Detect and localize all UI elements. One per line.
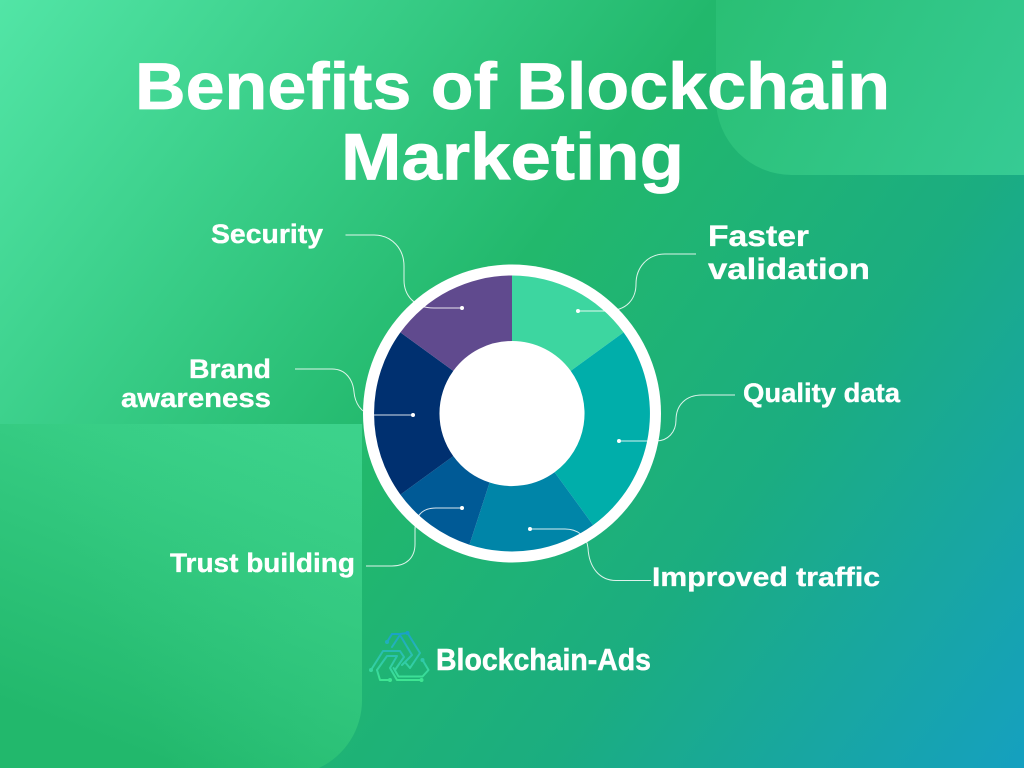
panel: top right (716, 0, 1024, 175)
slice: faster validation (512, 276, 624, 371)
slice: quality data (555, 332, 650, 525)
label: faster validation: Faster (708, 220, 809, 253)
slice: brand awareness (374, 332, 453, 495)
icon: logo mark (370, 632, 428, 681)
title: Benefits of Blockchain (135, 49, 890, 123)
logo (370, 632, 651, 681)
panel: bottom left (0, 424, 362, 768)
connector lines (295, 235, 735, 580)
label: faster validation (708, 220, 870, 286)
title: Marketing (341, 120, 684, 194)
label: faster validation: validation (708, 253, 870, 286)
label: improved traffic: Improved traffic (652, 562, 880, 592)
label: brand awareness: awareness (121, 383, 271, 413)
label: brand awareness: Brand (189, 354, 271, 384)
label: brand awareness (121, 354, 271, 413)
slice: trust building (400, 456, 490, 545)
outer ring (363, 264, 661, 562)
label: trust building: Trust building (170, 548, 355, 578)
slice: security (400, 276, 512, 371)
logo wordmark: Blockchain-Ads (436, 642, 651, 677)
label: quality data: Quality data (743, 378, 901, 408)
title (135, 49, 890, 194)
donut chart (363, 264, 661, 562)
label: security: Security (211, 219, 323, 249)
slice: improved traffic (469, 472, 593, 551)
connector dots (411, 306, 621, 531)
